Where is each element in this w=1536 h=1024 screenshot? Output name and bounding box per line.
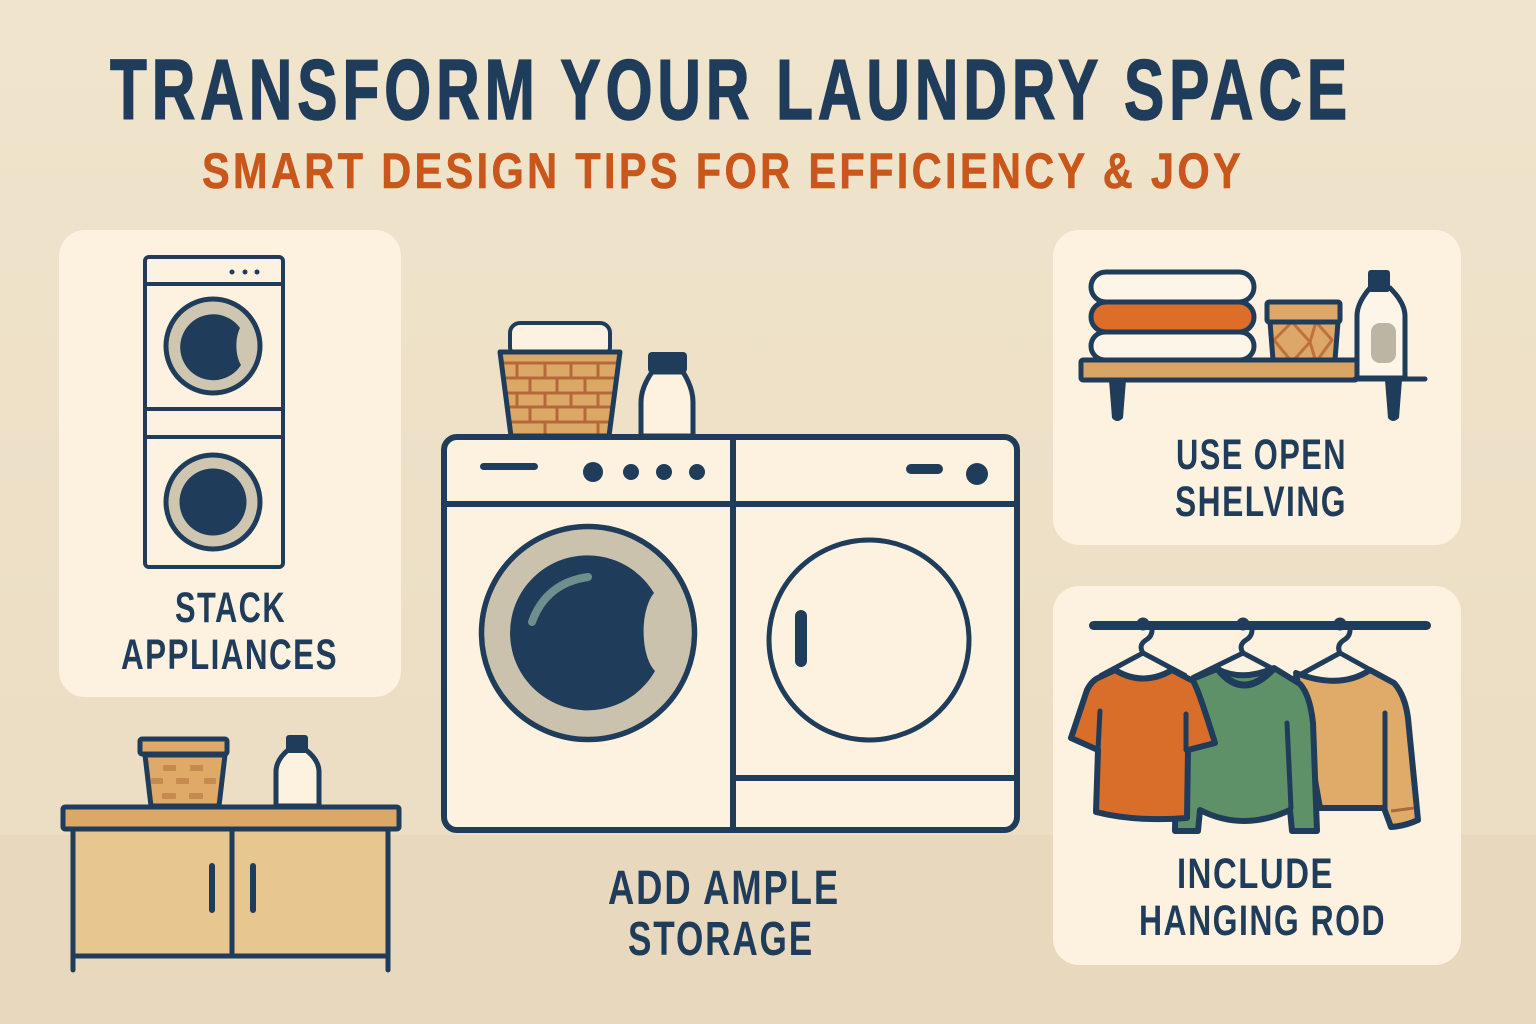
label: add ample storage: ADD AMPLE [608,862,840,915]
panel: include hanging rod [1053,586,1461,965]
icon: stacked washer and dryer [145,257,283,567]
icon: laundry basket on washer [498,323,622,436]
panel: use open shelving [1053,230,1461,545]
subtitle: SMART DESIGN TIPS FOR EFFICIENCY & JOY [202,143,1244,199]
label: include hanging rod: INCLUDE [1177,850,1334,898]
label: stack appliances [121,584,338,679]
label: use open shelving [1175,431,1347,526]
orange t-shirt [1071,670,1215,819]
washer controls [480,462,705,482]
label: stack appliances: STACK [175,584,286,632]
label: use open shelving: SHELVING [1175,478,1347,526]
label: stack appliances: APPLIANCES [121,631,338,679]
label: include hanging rod [1139,850,1386,945]
icon: detergent bottle on washer [641,352,693,436]
panel: stack appliances [59,230,401,697]
tan sweater [1296,670,1418,827]
washer door [482,526,694,740]
icon: shelf with towels, basket and bottle [1081,270,1425,421]
label: use open shelving: USE OPEN [1176,431,1347,479]
illustration: washer and dryer [444,437,1017,830]
icon: hanging rod with shirts [1071,618,1431,831]
dryer door [769,540,969,740]
label: include hanging rod: HANGING ROD [1139,897,1386,945]
green shirt [1175,668,1317,831]
label: add ample storage: STORAGE [628,913,814,966]
dryer controls [906,463,988,485]
icon: cabinet with basket and bottle [63,735,399,970]
label: add ample storage [608,862,840,966]
